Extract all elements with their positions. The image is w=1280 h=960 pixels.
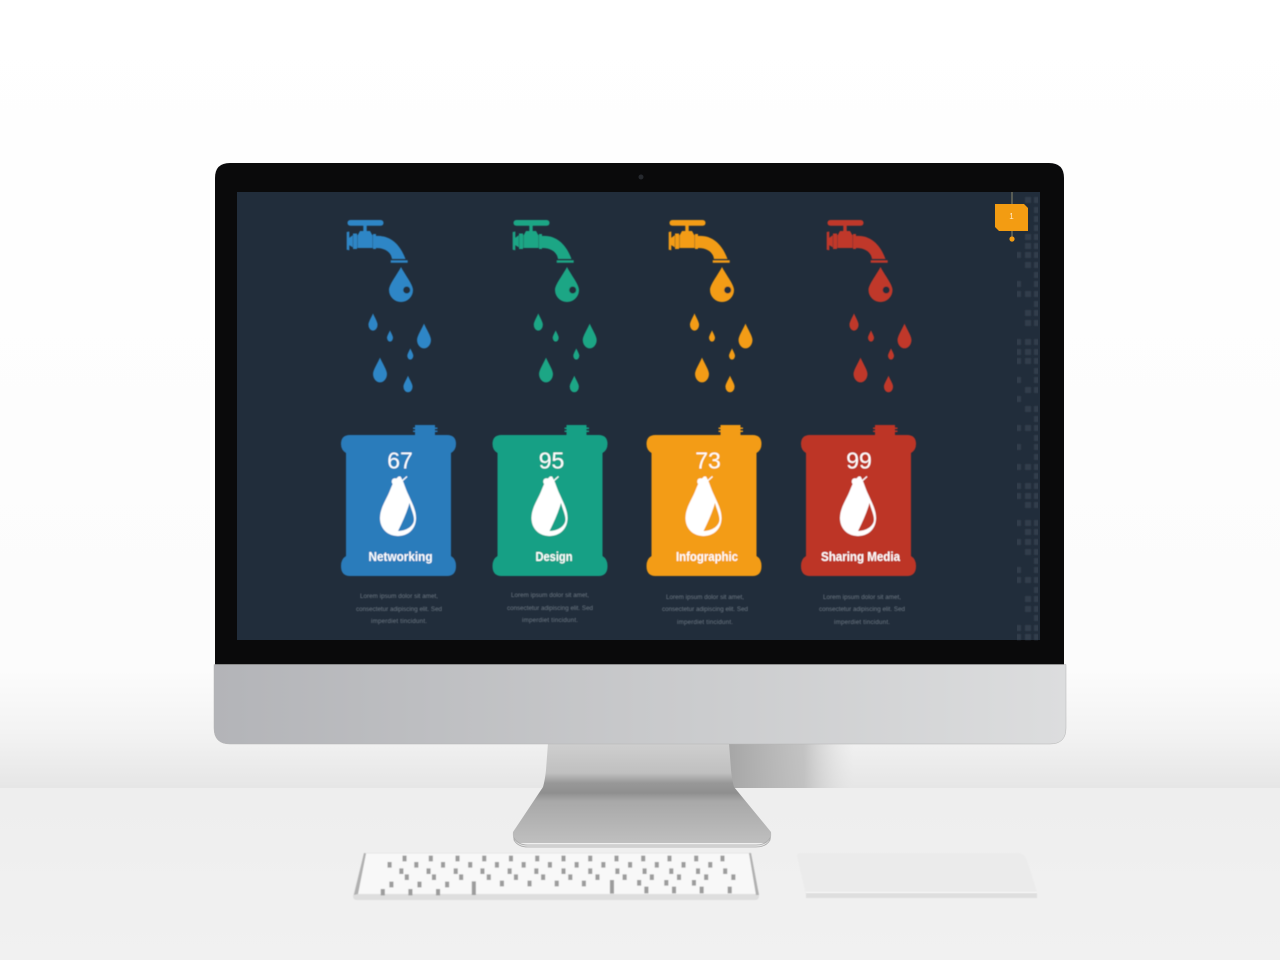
red jug [801, 425, 916, 576]
webcam [638, 174, 644, 180]
icon: red falling drop [868, 267, 892, 302]
trackpad [797, 853, 1037, 898]
background: desk surface [0, 788, 1280, 960]
icon: white drop [840, 476, 876, 536]
orange jug [646, 425, 762, 576]
slide screen [237, 192, 1040, 640]
icon: small blue drops [368, 313, 431, 392]
label Infographic: Infographic [676, 550, 738, 564]
description [819, 594, 906, 626]
description: imperdiet tincidunt. [522, 617, 578, 624]
description: imperdiet tincidunt. [371, 618, 427, 625]
page number badge [995, 192, 1028, 242]
icon: small red drops [849, 313, 911, 392]
icon: blue faucet [347, 220, 408, 263]
label Networking: Networking [368, 550, 432, 564]
strip mask beyond screen edge [1040, 192, 1046, 640]
monitor outer bezel [215, 163, 1064, 665]
icon: teal faucet [513, 220, 574, 263]
description: Lorem ipsum dolor sit amet, [360, 593, 438, 600]
column 4: Sharing Media [801, 220, 916, 626]
description: Lorem ipsum dolor sit amet, [666, 594, 744, 601]
decorative dot strip [1018, 197, 1037, 640]
monitor chin [214, 664, 1066, 744]
description [507, 592, 594, 624]
teal jug [492, 425, 608, 576]
icon: white drop [532, 476, 568, 536]
description [662, 594, 749, 626]
icon: white drop [380, 476, 416, 536]
monitor [214, 163, 1066, 744]
description: consectetur adipiscing elit. Sed [356, 606, 443, 613]
icon: small orange drops [690, 313, 752, 392]
blue jug [341, 425, 456, 576]
icon: blue falling drop [389, 267, 413, 302]
label Design: Design [536, 550, 572, 564]
icon: red faucet [827, 220, 888, 263]
value 99: 99 [846, 448, 872, 474]
icon: white drop [686, 476, 722, 536]
label Sharing Media: Sharing Media [821, 550, 901, 564]
stand shadow on wall [729, 744, 854, 788]
column 2: Design [492, 220, 608, 624]
keyboard [353, 853, 759, 900]
description: Lorem ipsum dolor sit amet, [511, 592, 589, 599]
description: imperdiet tincidunt. [677, 619, 733, 626]
description [356, 593, 443, 625]
monitor stand [513, 743, 771, 847]
description: imperdiet tincidunt. [834, 619, 890, 626]
description: consectetur adipiscing elit. Sed [819, 606, 906, 613]
description: consectetur adipiscing elit. Sed [507, 605, 594, 612]
value 73: 73 [695, 448, 721, 474]
column 1: Networking [341, 220, 456, 625]
description: Lorem ipsum dolor sit amet, [823, 594, 901, 601]
description: consectetur adipiscing elit. Sed [662, 606, 749, 613]
column 3: Infographic [646, 220, 762, 626]
page number badge: 1 [1009, 212, 1014, 221]
icon: orange falling drop [710, 267, 734, 302]
icon: teal falling drop [555, 267, 579, 302]
icon: orange faucet [669, 220, 730, 263]
value 67: 67 [387, 448, 413, 474]
icon: small teal drops [534, 313, 597, 392]
value 95: 95 [539, 448, 564, 474]
